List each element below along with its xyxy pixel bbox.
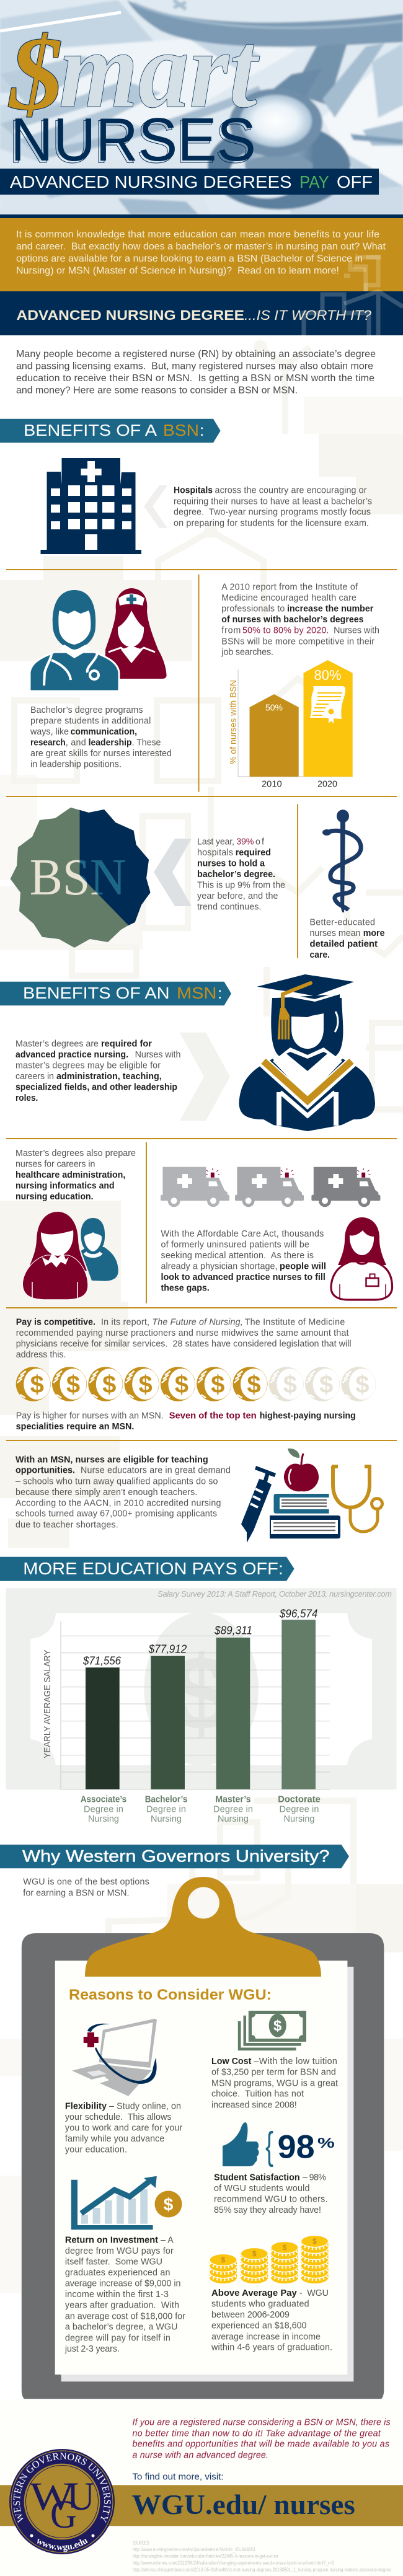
text: master's degrees: careers in [16,1072,54,1082]
text: bachelor's programs: ways, like [30,727,69,737]
coin 8: $ [283,1371,297,1398]
text: teaching opportunities: schools turned away 67,000+ promising applicants [16,1509,217,1519]
closing message: a nurse with an advanced degree. [133,2450,268,2460]
text: above average pay: between 2006-2009 [211,2310,290,2320]
text: teaching opportunities: Nurse educators are in great demand [81,1466,231,1476]
text: 39% of hospitals: hospitals [197,848,233,858]
seal: BSN [10,807,150,948]
chart category labels: Nursing [284,1814,315,1824]
text: 39% of hospitals: year before, and the [197,891,278,901]
text: hospitals: on preparing for students for the licensure exam. [174,518,369,528]
text: low cost [211,2057,338,2110]
text: 39% of hospitals: Last year, [197,837,234,847]
coin 10 [341,1367,376,1401]
text: master's degrees: Nurses with [135,1050,180,1060]
bar: associate's: $71,556 [82,1655,122,1667]
text: return on investment: graduates experienced an [65,2268,170,2278]
text: return on investment: Return on Investment [65,2235,158,2245]
text: teaching opportunities: because there simply aren’t enough teachers. [16,1488,197,1498]
text: WGU is one of the best: for earning a BSN or MSN. [23,1888,129,1898]
bar: 2010 [249,694,299,777]
text: low cost: Low Cost [211,2057,252,2067]
text: bachelor's programs [30,705,172,770]
text: better-educated nurses [310,918,385,960]
bar chart: percent of nurses with BSN: 2020 [317,779,337,789]
text: WGU is one of the best: WGU is one of the best options [23,1877,149,1887]
text: master's degrees: Master’s degrees are [16,1039,99,1049]
text: 2010 IOM report: Medicine encouraged health care [221,593,356,603]
text: above average pay: - WGU [299,2288,329,2298]
icon: graduate [239,974,375,1131]
sources: http://www.nursingcenter.com/lnc/journalarticle?Article_ID=604651 [133,2546,256,2552]
text: 39% of hospitals: 39% [236,837,254,847]
text: affordable care act: people will [280,1262,326,1272]
subtitle bar: OFF [337,172,373,192]
text: low cost: of $3,250 per term for BSN and [211,2068,336,2078]
header photo: stethoscope on dollar bills [0,0,403,214]
banner: benefits of a BSN [0,419,221,443]
panel: salary bar chart: $ [172,1634,231,1752]
text: flexibility: your schedule. This allows [65,2112,172,2122]
text: bachelor's programs: , and [66,738,86,748]
icon: thumbs up with 98%: { [265,2125,273,2168]
syringe [241,1466,276,1543]
divider [6,569,397,570]
coin 2: $ [66,1371,80,1398]
text: better-educated nurses: care. [310,950,330,960]
text: pay is higher: highest-paying nursing [260,1411,356,1421]
coin 7 [233,1367,268,1401]
subtitle bar: PAY [299,172,329,192]
icon: laptop [72,2019,157,2096]
text: return on investment: itself faster. Some WGU [65,2257,162,2267]
text: flexibility: family while you advance [65,2134,164,2144]
icon: woman and man [22,1212,118,1300]
coin 1: $ [30,1371,44,1398]
intro body text [16,349,376,395]
text: master's degrees [16,1039,180,1103]
stack 2 [241,2247,268,2283]
heading: is it worth it [0,291,403,335]
icon: rod of Asclepius [322,809,361,912]
banner: why WGU: Why Western Governors University? [22,1847,329,1866]
seal: BSN: BSN [30,849,126,906]
bar: doctorate [279,1607,317,1789]
arrow: chevron beside MSN text [180,1033,230,1121]
text: pay is competitive: physicians receive for similar services. 28 states have considered legislation that will [16,1339,352,1349]
text: bachelor's programs: Bachelor’s degree programs [30,705,143,715]
text: return on investment: years after graduation. With [65,2301,179,2311]
apple [284,1449,319,1491]
text: teaching opportunities [16,1455,231,1530]
text: master's degrees: master’s degrees may be eligible for [16,1061,161,1070]
text: pay is higher: Seven of the top ten [169,1411,257,1421]
text: above average pay: Above Average Pay [211,2288,297,2298]
sources: http://nursinglink.monster.com/education/articles/22045-5-reasons-to-get-a-msn [133,2553,278,2559]
text: low cost: increased since 2008! [211,2100,297,2110]
chart category labels: Master’s [215,1795,251,1805]
coin 10: $ [355,1371,370,1398]
logo: WGU seal [9,2449,115,2554]
arrow: chevron beside BSN seal [154,839,192,906]
text: above average pay: students who graduated [211,2300,309,2309]
title word: NURSES: NURSES [9,107,254,175]
coin 9: $ [319,1371,333,1398]
text: low cost: choice. Tuition has not [211,2089,304,2099]
chart category labels: Degree in [146,1804,186,1814]
banner: benefits of a BSN: BSN [163,421,199,439]
coin row: seven of ten [16,1367,376,1401]
text: above average pay [211,2288,332,2353]
banner: benefits of a BSN: BENEFITS OF A [24,421,157,439]
divider [6,1440,397,1441]
text: return on investment: income within the first 1-3 [65,2290,169,2300]
icon: growth chart with coin [71,2176,182,2230]
nurse figure [105,588,167,679]
banner: why WGU [0,1845,349,1868]
bar: 2020: 80% [314,667,341,683]
chart category labels: Bachelor’s [145,1795,187,1805]
icon: growth chart with coin: $ [164,2195,174,2214]
intro panel: It is common knowledge that more education can mean more benefits to your life [16,229,379,240]
text: pay is competitive: Pay is competitive. [16,1317,95,1327]
bar chart: percent of nurses with BSN: 2010 [262,779,282,789]
text: 2010 IOM report: . Nurses with [326,626,379,636]
text: low cost: –With the low tuition [254,2057,337,2067]
text: above average pay: experienced an $18,600 [211,2321,307,2331]
footer background [0,2399,403,2576]
closing message: benefits and opportunities that will be made available to you as [133,2440,389,2450]
woman figure [22,1212,88,1300]
URL band [0,2485,403,2526]
text: affordable care act: With the Affordable Care Act, thousands [161,1229,324,1239]
text: pay is higher [16,1411,356,1432]
banner: benefits of an MSN: MSN [177,984,216,1002]
text: return on investment [64,2235,185,2354]
text: bachelor's programs: . These [132,738,161,748]
text: return on investment: just 2-3 years. [64,2344,120,2354]
stethoscope [332,1466,382,1532]
text: return on investment: average increase of $9,000 in [65,2279,180,2289]
logo: WGU seal: W [30,2474,74,2519]
text: flexibility [65,2101,183,2155]
text: 2010 IOM report [221,583,379,658]
text: 2010 IOM report: job searches. [221,648,273,658]
logo: WGU seal: U [67,2474,95,2519]
text: master's also prepare: nursing informatics and [16,1181,114,1191]
coin 2 [52,1367,87,1401]
sources: SOURCES: [133,2539,150,2546]
text: master's also prepare: nursing education. [16,1192,93,1202]
text: affordable care act: seeking medical attention. As there is [161,1251,314,1261]
heading: reasons: Reasons to Consider WGU: [69,1987,272,2003]
stack 1 [210,2254,237,2283]
text: flexibility: your education. [65,2145,127,2155]
icon: ambulance 3 [311,1167,380,1207]
seal: BSN: BSN [30,849,126,906]
intro panel: options are available for a nurse looking to earn a BSN (Bachelor of Science in [16,254,363,264]
text: better-educated nurses: detailed patient [310,940,378,950]
text: 2010 IOM report: BSNs will be more competitive in their [221,637,374,646]
chart category labels: Degree in [84,1804,123,1814]
icon: diploma [310,686,345,723]
text: 39% of hospitals: trend continues. [197,902,262,912]
text: hospitals: Hospitals [174,486,213,496]
logo: WGU seal: WESTERN GOVERNORS UNIVERSITY [13,2453,111,2523]
text: teaching opportunities: With an MSN, nurses are eligible for teaching [16,1455,208,1465]
bar: master's [214,1625,252,1789]
title [8,8,260,175]
text: student satisfaction: 85% say they already have! [214,2205,321,2215]
chart category labels: Nursing [151,1814,182,1824]
text: 39% of hospitals: This is up 9% from the [197,880,285,890]
panel: clipboard [22,1877,384,2399]
text: master's also prepare [16,1149,136,1202]
divider [6,1307,397,1308]
text: 2010 IOM report: 50% to 80% by 2020 [242,626,326,636]
text: 2010 IOM report: of nurses with bachelor’s degrees [221,615,364,625]
text: 2010 IOM report: A 2010 report from the Institute of [221,583,358,593]
icon: doctor and nurse [30,588,167,691]
icon: ambulance 1 [161,1167,229,1207]
text: affordable care act: look to advanced practice nurses to fill [161,1273,326,1282]
text: pay is competitive: recommended paying nurse practioners and nurse midwives the same amount that [16,1328,349,1338]
text: pay is competitive: The Institute of Medicine [245,1317,345,1327]
coin 3: $ [102,1371,116,1398]
chart category labels: Associate’s [81,1795,126,1805]
text: return on investment: degree from WGU pays for [65,2246,174,2256]
text: 39% of hospitals: bachelor’s degree. [197,870,275,880]
text: master's also prepare: nurses for careers in [16,1160,95,1170]
text: student satisfaction: Student Satisfaction [214,2172,300,2182]
coin 7: $ [247,1371,261,1398]
text: pay is competitive: The Future of Nursing, [152,1317,243,1327]
text: student satisfaction [214,2172,327,2215]
text: flexibility: – Study online, on [109,2101,181,2111]
text: master's degrees: specialized fields, and other leadership [16,1082,177,1092]
text: 39% of hospitals: nurses to hold a [197,859,265,869]
clipboard clip [85,1877,321,1977]
chart category labels: Nursing [218,1814,249,1824]
coin 9 [305,1367,340,1401]
text: pay is higher: Pay is higher for nurses with an MSN. [16,1411,164,1421]
bar: doctorate: $96,574 [279,1607,317,1620]
subtitle bar [0,169,379,195]
banner: benefits of an MSN: BENEFITS OF AN [23,984,170,1002]
text: pay is competitive: address this. [16,1350,66,1360]
closing message [133,2418,391,2460]
icon: thumbs up with 98% [223,2122,335,2168]
source note: Salary Survey 2013: A Staff Report, October 2013, nursingcenter.com [157,1589,392,1599]
panel: salary bar chart [6,1588,397,1789]
bar: bachelor's: $77,912 [148,1643,187,1656]
text: 2010 IOM report: increase the number [287,604,374,614]
title word: $mart: mart [59,8,260,131]
text: bachelor's programs: research [30,738,66,748]
banner: benefits of a BSN: : [200,421,204,439]
intro body text: and passing licensing exams. But, many registered nurses may also obtain more [16,361,373,372]
text: better-educated nurses: nurses mean [310,929,361,938]
stack 1: $ [221,2256,226,2264]
icon: thumbs up with 98%: 98 [278,2129,315,2166]
text: master's degrees: advanced practice nursing. [16,1050,128,1060]
logo: WGU seal: G [50,2492,77,2537]
paper sheets [55,1961,353,2381]
subtitle bar: ADVANCED NURSING DEGREES [10,172,291,192]
text: hospitals: across the country are encouraging or [215,486,367,496]
chart category labels: Degree in [213,1804,253,1814]
icon: ambulance 2 [235,1167,304,1207]
text: teaching opportunities: opportunities. [16,1466,75,1476]
logo: WGU seal: www.wgu.edu [37,2539,88,2552]
bar: associate's [82,1655,122,1789]
stack 3: $ [283,2243,287,2252]
text: teaching opportunities: – schools who turn away qualified applicants do so [16,1476,218,1486]
text: 39% of hospitals: required [236,848,271,858]
title word: NURSES: NURSES [11,105,256,174]
bar: 2010: 50% [265,703,283,713]
sources [133,2539,391,2572]
text: pay is higher: specialities require an MSN. [16,1422,134,1432]
text: bachelor's programs: communication, [71,727,137,737]
background pattern [0,340,403,2293]
text: teaching opportunities: due to teacher shortages. [16,1520,118,1530]
stack 4: $ [312,2237,317,2246]
text: affordable care act: already a physician shortage, [161,1262,278,1272]
coin 3 [88,1367,123,1401]
text: better-educated nurses: Better-educated [310,918,375,928]
text: master's also prepare: Master’s degrees also prepare [16,1149,136,1158]
intro panel [0,214,403,298]
text: 39% of hospitals: of [255,837,264,847]
divider [6,796,397,797]
banner: benefits of an MSN [0,982,231,1005]
closing message: If you are a registered nurse considering a BSN or MSN, there is [133,2418,391,2428]
coin 5: $ [175,1371,188,1398]
icon: hospital [41,458,141,554]
text: student satisfaction: of WGU students would [214,2184,310,2194]
bar: 2020 [304,660,353,777]
text: return on investment: degree will pay for itself in [65,2333,170,2343]
text: student satisfaction: recommend WGU to others. [214,2195,327,2205]
text: bachelor's programs: are great skills for nurses interested [30,749,172,759]
text: 39% of hospitals [197,837,285,912]
chart category labels [81,1795,321,1824]
sources: http://www.nytimes.com/2012/06/24/education/changing-requirements-send-nurses-back-to-school.html?_r=0 [133,2560,334,2566]
stack 4 [301,2235,329,2283]
bar: master's: $89,311 [214,1625,252,1637]
coin 6 [197,1367,231,1401]
arrow: chevron to hospital text [144,485,167,528]
text: hospitals: degree. Two-year nursing programs mostly focus [174,508,371,518]
bar chart: percent of nurses with BSN: % of nurses with BSN [228,680,238,764]
intro panel: Nursing) or MSN (Master of Science in Nursing)? Read on to learn more! [16,265,339,276]
stack 3 [271,2241,298,2283]
text: better-educated nurses: more [363,929,385,938]
text: master's degrees: administration, teaching, [56,1072,162,1082]
text: teaching opportunities: According to the AACN, in 2010 accredited nursing [16,1498,221,1508]
text: affordable care act [161,1229,326,1294]
divider [6,1138,397,1139]
text: master's also prepare: healthcare administration, [16,1170,125,1180]
text: bachelor's programs: prepare students in additional [30,717,151,726]
text: flexibility: you to work and care for your [65,2123,183,2133]
heading: is it worth it: ...IS IT WORTH IT? [244,307,372,323]
coin 5 [161,1367,195,1401]
text: above average pay: average increase in income [211,2332,321,2342]
heading: is it worth it: ADVANCED NURSING DEGREE [16,307,244,323]
chart category labels: Doctorate [278,1795,321,1805]
text: master's degrees: required for [101,1039,152,1049]
y axis label: YEARLY AVERAGE SALARY [43,1649,53,1758]
title word: $mart: $ [8,15,63,132]
banner: more education pays off [0,1557,294,1581]
text: low cost: MSN programs, WGU is a great [211,2078,338,2088]
text: return on investment: an average cost of $18,000 for [65,2311,185,2321]
coin 1 [16,1367,51,1401]
URL band: WGU.edu/ nurses [132,2489,355,2520]
intro body text: Many people become a registered nurse (RN) by obtaining an associate’s degree [16,349,376,359]
text: affordable care act: of formerly uninsured patients will be [161,1240,309,1250]
coin 4 [125,1367,159,1401]
text: bachelor's programs: in leadership positions. [30,760,122,770]
icon: money stack [238,2011,306,2050]
text: return on investment: a bachelor’s degree, a WGU [65,2322,177,2332]
text: above average pay: within 4-6 years of graduation. [211,2343,332,2353]
icon: coin stacks [210,2235,329,2283]
call to action label: To find out more, visit: [133,2471,224,2482]
coin 8 [269,1367,304,1401]
text: hospitals [174,486,372,528]
intro body text: and money? Here are some reasons to consider a BSN or MSN. [16,385,298,395]
text: flexibility: Flexibility [65,2101,107,2111]
banner: benefits of an MSN: : [218,984,222,1002]
bar chart: percent of nurses with BSN [228,660,353,789]
text: 2010 IOM report: professionals to [221,604,285,614]
doctor figure [30,590,119,691]
text: master's degrees: roles. [16,1093,38,1103]
books [270,1494,340,1538]
banner: more education pays off: MORE EDUCATION PAYS OFF: [23,1559,283,1578]
chart category labels: Nursing [88,1814,119,1824]
icon: thumbs up with 98%: % [317,2135,335,2151]
coin 4: $ [138,1371,153,1398]
chart category labels: Degree in [279,1804,319,1814]
icon: teaching supplies [241,1449,382,1543]
coin 6: $ [211,1371,224,1398]
icon: nurse with badge [331,1217,392,1300]
text: return on investment: – A [161,2235,174,2245]
text: student satisfaction: – 98% [303,2172,326,2182]
text: WGU is one of the best [23,1877,149,1898]
intro body text: education to receive their BSN or MSN. Is getting a BSN or MSN worth the time [16,373,374,384]
text: bachelor's programs: leadership [89,738,132,748]
text: pay is competitive: In its report, [101,1317,149,1327]
text: 2010 IOM report: from [221,626,241,636]
stack 2: $ [252,2249,257,2258]
icon: money stack: $ [273,2018,282,2034]
text: pay is competitive [16,1317,352,1360]
man figure [81,1218,118,1281]
closing message: no better time than now to do it! Take advantage of the great [133,2428,381,2438]
bar: bachelor's [148,1643,187,1789]
text: hospitals: requiring their nurses to have at least a bachelor’s [174,496,372,506]
intro panel: and career. But exactly how does a bachelor’s or master’s in nursing pan out? What [16,242,386,252]
text: affordable care act: these gaps. [161,1284,210,1294]
